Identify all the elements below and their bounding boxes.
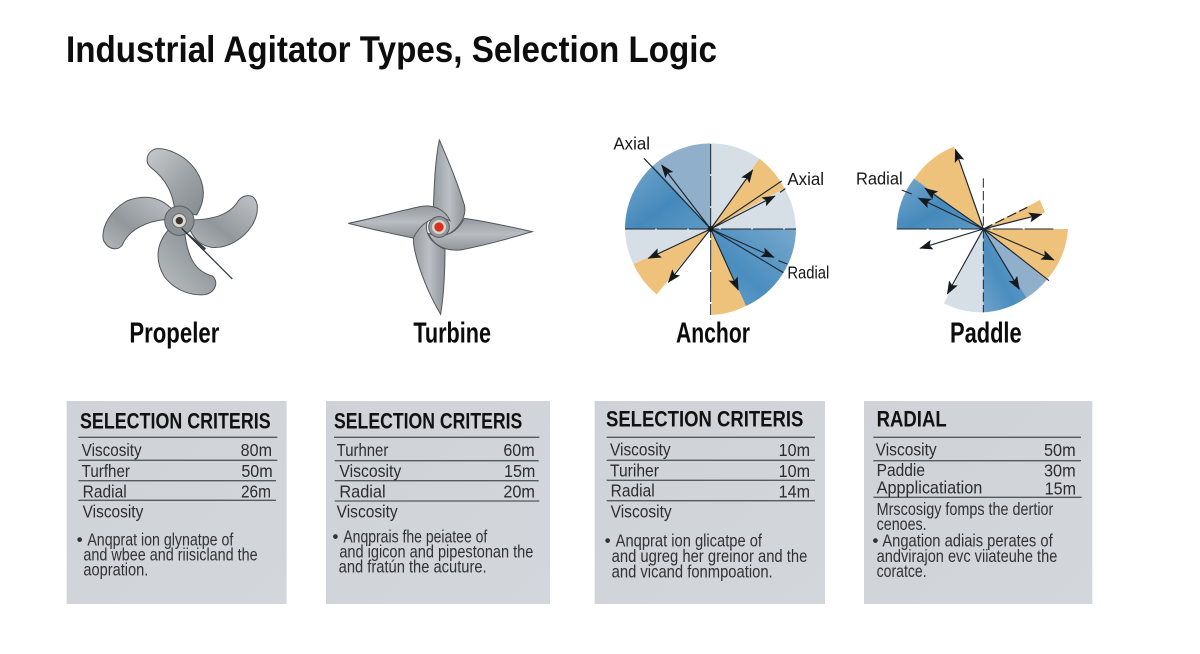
title: Industrial Agitator Types, Selection Logic <box>66 29 717 70</box>
table rows <box>337 440 535 522</box>
table rows: 80m <box>241 440 272 460</box>
table rows: Viscosity <box>337 502 398 522</box>
table rows: Viscosity <box>876 439 937 459</box>
description: • <box>605 530 611 550</box>
label: Axial right: Axial <box>787 169 824 189</box>
table rows: 15m <box>1045 478 1076 498</box>
table rows <box>876 439 1076 498</box>
table rows: Viscosity <box>339 461 401 481</box>
heading: RADIAL <box>877 406 947 431</box>
table rows: 30m <box>1044 461 1076 481</box>
table rows: Radial <box>339 482 386 502</box>
table rows <box>610 439 810 521</box>
description: and vicand fonmpoation. <box>612 562 773 582</box>
table rows: Radial <box>611 481 655 501</box>
table rows: Viscosity <box>610 439 671 459</box>
table rows: Radial <box>83 481 127 501</box>
heading: SELECTION CRITERIS <box>606 406 803 431</box>
description: • <box>872 530 878 550</box>
description: coratce. <box>877 561 927 581</box>
label: Turbine: Turbine <box>413 318 491 350</box>
table rows: 50m <box>241 461 273 481</box>
table rows: Turfher <box>82 461 130 481</box>
table rows: Paddie <box>877 460 925 480</box>
table rows: 10m <box>779 461 810 481</box>
label: Anchor: Anchor <box>676 317 750 349</box>
description: and igicon and pipestonan the <box>339 542 533 562</box>
label: Propeler: Propeler <box>129 318 219 350</box>
description: and wbee and riisicland the <box>83 545 258 565</box>
label: Radial paddle: Radial <box>856 168 903 188</box>
table rows: 50m <box>1044 440 1076 460</box>
table rows: Turhner <box>337 440 388 460</box>
table rows: 26m <box>241 481 271 501</box>
description: Anqprat ion glynatpe of <box>87 530 233 550</box>
description: • <box>77 530 83 550</box>
description: and fratún the acuture. <box>339 557 487 577</box>
panel: propeller criteria <box>67 401 287 604</box>
table rows: 10m <box>779 440 810 460</box>
panel: anchor criteria <box>595 401 825 604</box>
description <box>605 530 807 582</box>
description: and ugreg her greinor and the <box>612 546 807 566</box>
table rows: Turiher <box>610 460 659 480</box>
panel: turbine criteria <box>326 401 550 604</box>
chart: paddle flow wedges <box>856 147 1068 312</box>
label: Paddle: Paddle <box>950 317 1022 349</box>
description: aopration. <box>83 559 148 579</box>
table rows: 60m <box>503 440 535 460</box>
chart: anchor flow wedges <box>613 133 829 315</box>
description: cenoes. <box>877 514 927 534</box>
table rows: Viscosity <box>611 501 672 521</box>
description: Anqprais fhe peiatee of <box>343 527 487 547</box>
description <box>872 499 1057 581</box>
description <box>77 530 258 579</box>
description: • <box>332 527 338 547</box>
table rows: Appplicatiation <box>877 478 982 498</box>
icon: propeller <box>103 149 257 295</box>
table rows: Viscosity <box>82 440 142 460</box>
description <box>332 527 533 577</box>
description: andvirajon evc viiateuhe the <box>877 546 1057 566</box>
description: Angation adiais perates of <box>882 530 1053 550</box>
description: Anqprat ion glicatpe of <box>616 530 762 550</box>
icon: turbine <box>348 140 532 314</box>
table rows: 20m <box>503 482 535 502</box>
label: Axial left: Axial <box>613 133 650 153</box>
panel: paddle criteria <box>864 401 1092 604</box>
table rows: 15m <box>504 461 535 481</box>
heading: SELECTION CRITERIS <box>334 409 522 434</box>
heading: SELECTION CRITERIS <box>80 408 271 433</box>
description: Mrscosigy fomps the dertior <box>877 499 1054 519</box>
table rows: 14m <box>779 481 810 501</box>
table rows: Viscosity <box>83 502 143 522</box>
label: Radial: Radial <box>787 263 829 283</box>
table rows <box>82 440 273 522</box>
